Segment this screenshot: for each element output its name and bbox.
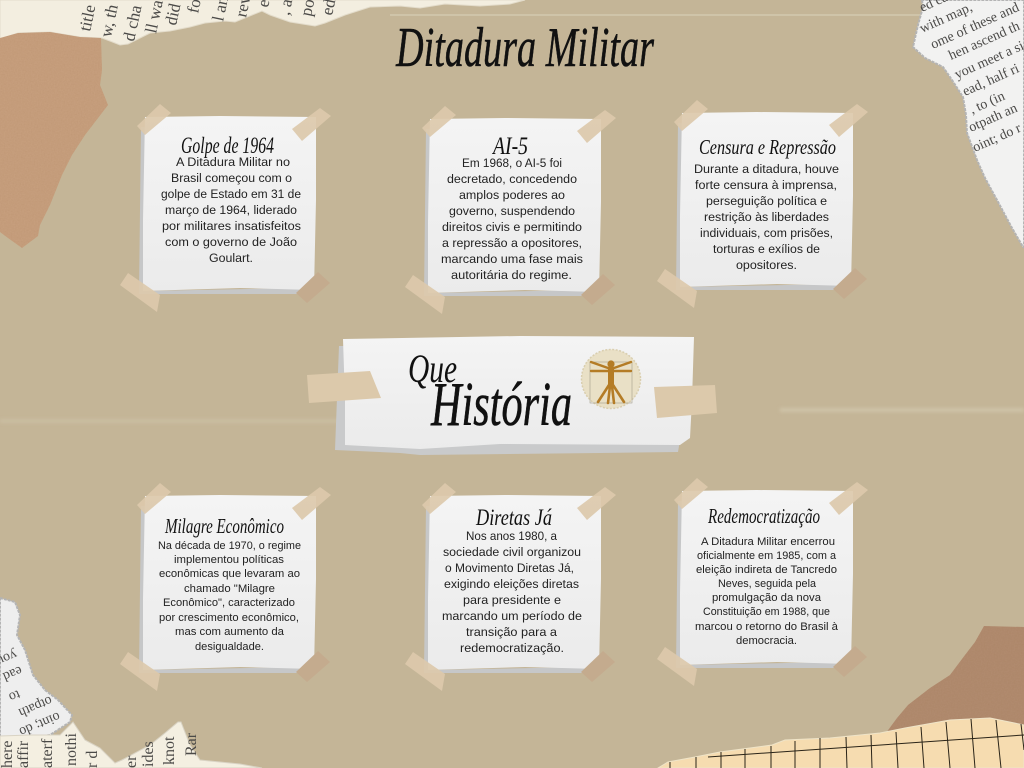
text: Milagre Econômico: Econômico", caracterizado xyxy=(163,597,295,609)
torn paper: bottom left book pages xyxy=(0,598,262,768)
torn paper: bottom left book pages: to xyxy=(6,686,22,704)
text: Milagre Econômico: por crescimento econômico, xyxy=(159,612,299,624)
torn paper: top book page strip: title xyxy=(75,3,99,33)
text: Diretas Já: marcando um período de xyxy=(442,609,582,623)
torn paper: bottom right grid paper xyxy=(658,718,1024,768)
panel: Golpe de 1964 xyxy=(120,104,331,312)
text: Redemocratização: marcou o retorno do Brasil à xyxy=(695,621,839,633)
text: Diretas Já: Nos anos 1980, a xyxy=(466,529,557,543)
text: Censura e Repressão: perseguição política e xyxy=(706,194,827,208)
text: Diretas Já: exigindo eleições diretas xyxy=(444,577,579,591)
title: Ditadura Militar xyxy=(395,17,654,79)
torn paper: top book page strip: did xyxy=(161,1,185,27)
torn paper: left brown scrap xyxy=(0,32,108,248)
text: Golpe de 1964: golpe de Estado em 31 de xyxy=(161,187,301,201)
torn paper: top right book page: otpath an xyxy=(967,101,1020,136)
torn paper: bottom right brown scrap xyxy=(886,626,1024,740)
torn paper: bottom left book pages: er xyxy=(123,755,140,768)
text: AI-5: direitos civis e permitindo xyxy=(442,220,582,234)
heading: Redemocratização: Redemocratização xyxy=(707,504,820,528)
text: Milagre Econômico: desigualdade. xyxy=(195,641,264,653)
heading: Milagre Econômico: Milagre Econômico xyxy=(164,514,284,538)
text: AI-5: amplos poderes ao xyxy=(459,188,565,202)
panel: AI-5 xyxy=(405,106,616,314)
text: AI-5: decretado, concedendo xyxy=(447,172,577,186)
text: AI-5: governo, suspendendo xyxy=(449,204,575,218)
text: Redemocratização: oficialmente em 1985, com a xyxy=(697,550,837,562)
banner: Que História xyxy=(307,336,717,455)
text: Censura e Repressão: forte censura à imprensa, xyxy=(695,178,837,192)
text: Diretas Já: para presidente e xyxy=(463,593,561,607)
heading: História: História xyxy=(430,371,572,439)
text: Censura e Repressão: individuais, com prisões, xyxy=(700,226,833,240)
text: Golpe de 1964: por militares insatisfeitos xyxy=(162,219,301,233)
heading: Que: Que xyxy=(408,346,457,391)
tape: left xyxy=(307,371,381,403)
text: Redemocratização: A Ditadura Militar encerrou xyxy=(701,536,835,548)
text: Diretas Já: redemocratização. xyxy=(460,641,564,655)
text: Milagre Econômico: chamado "Milagre xyxy=(184,583,275,595)
text: Golpe de 1964: Goulart. xyxy=(209,251,253,265)
heading: Golpe de 1964: Golpe de 1964 xyxy=(181,133,274,158)
text: Diretas Já: transição para a xyxy=(466,625,557,639)
torn paper: top right book page: ead, half ri xyxy=(961,61,1022,100)
text: AI-5: marcando uma fase mais xyxy=(441,252,583,266)
text: Diretas Já: sociedade civil organizou xyxy=(443,545,581,559)
heading: Diretas Já: Diretas Já xyxy=(475,505,552,530)
text: AI-5: Em 1968, o AI-5 foi xyxy=(462,156,562,170)
text: Golpe de 1964: A Ditadura Militar no xyxy=(176,155,290,169)
torn paper: top right book page xyxy=(913,0,1024,247)
text: Redemocratização: promulgação da nova xyxy=(712,592,822,604)
torn paper: bottom left book pages: ead xyxy=(1,662,24,684)
torn paper: top book page strip xyxy=(0,0,525,45)
tape: right xyxy=(654,385,717,418)
text: Censura e Repressão: torturas e exílios de xyxy=(713,242,820,256)
text: AI-5: autoritária do regime. xyxy=(451,268,572,282)
torn paper: bottom left book pages: aterf xyxy=(39,738,56,768)
torn paper: top book page strip: w, th xyxy=(96,2,122,39)
panel: Milagre Econômico xyxy=(120,483,331,691)
panel: Redemocratização xyxy=(657,478,868,686)
panel: Censura e Repressão xyxy=(657,100,868,308)
text: Redemocratização: Constituição em 1988, que xyxy=(703,606,830,618)
torn paper: bottom left book pages: otpath xyxy=(16,692,54,720)
text: Milagre Econômico: mas com aumento da xyxy=(175,626,285,638)
torn paper: bottom left book pages: oint; do xyxy=(17,708,62,739)
torn paper: top book page strip: d cha xyxy=(119,3,146,43)
text: Diretas Já: o Movimento Diretas Já, xyxy=(445,561,574,575)
text: Redemocratização: democracia. xyxy=(736,635,797,647)
text: Redemocratização: eleição indireta de Tancredo xyxy=(696,564,837,576)
torn paper: top right book page: with map, xyxy=(918,0,975,37)
text: Golpe de 1964: março de 1964, liderado xyxy=(165,203,297,217)
torn paper: top right book page: oint; do r xyxy=(971,121,1024,156)
heading: Censura e Repressão: Censura e Repressão xyxy=(699,135,836,159)
icon: Vitruvian man seal xyxy=(582,350,640,408)
torn paper: bottom left book pages: affir xyxy=(15,740,32,768)
torn paper: top right book page: hen ascend th xyxy=(947,19,1022,64)
text: Censura e Repressão: Durante a ditadura, houve xyxy=(694,162,839,176)
torn paper: bottom left book pages: r d xyxy=(84,751,101,768)
text: Milagre Econômico: implementou políticas xyxy=(174,554,284,566)
text: AI-5: a repressão a opositores, xyxy=(442,236,582,250)
torn paper: top right book page: , to (in xyxy=(968,89,1007,118)
panel: Diretas Já xyxy=(405,483,616,691)
torn paper: bottom left book pages: nothi xyxy=(63,733,80,766)
text: Milagre Econômico: econômicas que levaram ao xyxy=(159,568,300,580)
torn paper: bottom left book pages: knot xyxy=(161,736,178,765)
text: Milagre Econômico: Na década de 1970, o regime xyxy=(158,540,301,552)
heading: AI-5: AI-5 xyxy=(491,133,528,160)
text: Censura e Repressão: opositores. xyxy=(736,258,797,272)
torn paper: bottom left book pages: ides xyxy=(140,741,157,767)
torn paper: top right book page: ome of these and xyxy=(929,0,1022,53)
text: Golpe de 1964: Brasil começou com o xyxy=(171,171,292,185)
text: Censura e Repressão: restrição às liberdades xyxy=(704,210,829,224)
torn paper: bottom left book pages: Rar xyxy=(183,732,200,756)
text: Redemocratização: Neves, seguida pela xyxy=(718,578,817,590)
text: Golpe de 1964: com o governo de João xyxy=(165,235,297,249)
